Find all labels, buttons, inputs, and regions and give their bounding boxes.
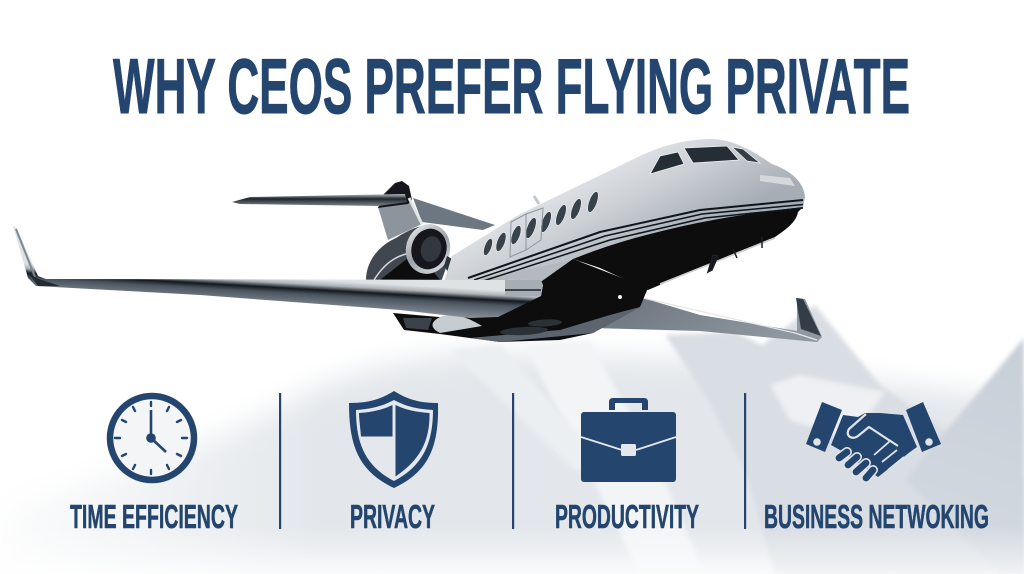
icon: handshake <box>806 402 941 478</box>
divider <box>512 393 514 529</box>
private jet illustration <box>13 139 822 342</box>
far wing <box>593 298 822 342</box>
cheatline stripes <box>468 200 803 278</box>
wing root fairing and rear belly <box>393 259 648 342</box>
rear engine <box>366 219 461 285</box>
icon: shield <box>349 391 438 488</box>
icon: briefcase <box>581 398 676 482</box>
divider <box>279 393 281 529</box>
label: privacy: PRIVACY <box>350 498 435 535</box>
label: productivity: PRODUCTIVITY <box>555 498 699 535</box>
cockpit windows <box>650 152 684 174</box>
passenger windows <box>482 190 601 257</box>
label: time efficiency: TIME EFFICIENCY <box>70 498 238 535</box>
near wing with winglet <box>13 226 543 318</box>
fuselage <box>444 139 805 300</box>
divider <box>744 393 746 529</box>
icon: clock <box>110 396 194 480</box>
tail fin and stabilizers <box>232 181 495 240</box>
landing gear <box>708 237 762 272</box>
black belly <box>573 207 803 290</box>
